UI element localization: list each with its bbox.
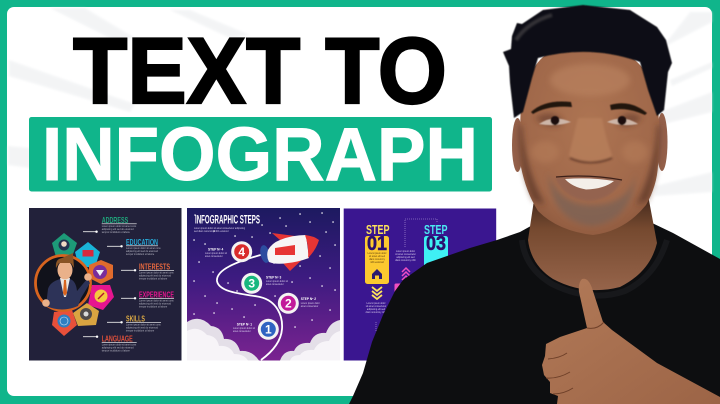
card: step 03 — [424, 222, 448, 276]
rocket trail path — [217, 254, 282, 360]
hair — [503, 5, 672, 118]
step markers: 4 — [238, 245, 245, 259]
hair highlight — [516, 15, 552, 40]
profile labels: tempor incididunt ut labore — [139, 278, 168, 280]
step notes: adipiscing elit sed — [396, 256, 415, 259]
icon: rocket — [259, 233, 319, 271]
step captions: STEP Nº 2 — [301, 297, 316, 301]
eyebrows — [531, 101, 647, 115]
step captions: Lorem ipsum dolor sit — [233, 327, 255, 330]
beard shadow and chin — [548, 172, 636, 226]
profile labels: adipiscing elit sed do eiusmod — [102, 346, 134, 350]
panel: step cards — [344, 208, 496, 360]
title banner: INFOGRAPH: INFOGRAPH — [42, 112, 478, 196]
step captions: Lorem ipsum dolor — [301, 302, 320, 305]
step markers — [231, 241, 299, 340]
profile labels: EXPERIENCE — [139, 290, 174, 300]
profile labels: adipiscing elit sed do eiusmod — [126, 250, 159, 253]
profile labels: Lorem ipsum dolor sit amet cons — [102, 344, 137, 346]
black shirt — [349, 222, 720, 404]
step captions: Lorem ipsum dolor sit — [205, 252, 227, 255]
card: step 01 — [365, 222, 390, 284]
step markers: 1 — [265, 323, 272, 337]
profile labels: SKILLS — [126, 314, 145, 324]
step captions: amet consectetur — [205, 255, 223, 258]
profile labels: Lorem ipsum dolor sit amet cons — [139, 300, 174, 302]
profile hexagon icons — [52, 233, 114, 336]
profile labels: tempor incididunt ut labore — [126, 253, 155, 256]
presenter photo — [349, 5, 720, 404]
neck — [528, 195, 657, 290]
panel: profile infographic — [29, 208, 182, 360]
profile labels: Lorem ipsum dolor sit amet cons — [102, 225, 137, 228]
clouds — [187, 319, 340, 360]
step captions — [205, 248, 320, 333]
profile labels: INTERESTS — [139, 262, 170, 272]
card: step 01: Lorem ipsum dolor — [367, 252, 387, 255]
step captions: STEP Nº 4 — [208, 248, 224, 252]
step captions: STEP Nº 1 — [237, 322, 252, 326]
steps title: INFOGRAPHIC STEPS — [195, 214, 260, 226]
step notes: adipiscing elit sed — [367, 308, 386, 311]
icon: yellow chevrons — [372, 287, 382, 299]
card: step 01: STEP — [366, 222, 390, 237]
step markers: 2 — [285, 297, 292, 311]
step notes: Lorem ipsum dolor — [396, 250, 415, 253]
thumbs up hand — [542, 279, 720, 404]
background rays — [8, 8, 712, 196]
profile ring with businessman — [36, 253, 92, 310]
panel: infographic steps rocket: Lorem ipsum dolor sit amet consectetur adipiscing — [194, 227, 246, 230]
step captions: amet consectetur — [233, 330, 251, 333]
smile — [555, 176, 622, 201]
dashed connector — [376, 219, 437, 331]
profile labels: Lorem ipsum dolor sit amet cons — [126, 324, 161, 326]
step notes: diam nonummy nibh — [395, 260, 417, 262]
card: step 01: 01 — [367, 233, 387, 255]
pink card edge — [394, 284, 404, 296]
icon: pink chevrons — [402, 268, 410, 280]
eyes — [539, 116, 638, 125]
step captions: Lorem ipsum dolor sit — [266, 280, 288, 283]
profile labels: LANGUAGE — [102, 334, 133, 344]
profile labels: EDUCATION — [126, 237, 158, 247]
profile labels: Lorem ipsum dolor sit amet cons — [126, 247, 161, 250]
profile labels: ADDRESS — [102, 215, 128, 225]
step markers: 3 — [248, 277, 255, 291]
step notes — [366, 250, 417, 314]
profile labels: tempor incididunt ut labore — [139, 306, 168, 308]
card: step 03: STEP — [424, 222, 448, 237]
profile labels: Lorem ipsum dolor sit amet cons — [139, 272, 174, 274]
step captions: amet consectetur — [266, 283, 284, 286]
profile labels: adipiscing elit sed do eiusmod — [102, 228, 134, 231]
title: TEXT TO: TEXT TO — [73, 18, 447, 123]
panel: infographic steps rocket — [187, 208, 340, 360]
face — [520, 42, 660, 235]
profile labels: adipiscing elit sed do eiusmod — [139, 302, 172, 306]
step notes: sit amet consectetur — [366, 305, 387, 308]
step captions: amet consectetur — [301, 305, 319, 308]
nose — [569, 118, 612, 163]
ears — [512, 113, 668, 172]
profile labels — [83, 215, 174, 352]
profile labels: adipiscing elit sed do eiusmod — [139, 274, 172, 278]
panel: infographic steps rocket: sed diam nonummy nibh euismod — [194, 231, 229, 233]
profile labels: tempor incididunt ut labore — [102, 350, 131, 352]
card: step 01: nibh euismod — [370, 262, 385, 264]
collar rib — [522, 240, 667, 296]
profile labels: adipiscing elit sed do eiusmod — [126, 326, 159, 330]
card: step 01: diam nonummy — [369, 259, 386, 261]
card: step 01: sit amet elit sed — [369, 255, 386, 258]
step notes: Lorem ipsum dolor — [366, 302, 386, 305]
card: step 03: 03 — [426, 233, 446, 255]
profile labels: tempor incididunt ut labore — [102, 231, 131, 234]
step notes: sit amet consectetur — [395, 253, 416, 256]
cheek shading — [519, 64, 660, 205]
step captions: STEP Nº 3 — [266, 276, 282, 280]
step notes: diam nonummy nibh — [366, 312, 387, 314]
profile labels: tempor incididunt ut labore — [126, 330, 155, 332]
